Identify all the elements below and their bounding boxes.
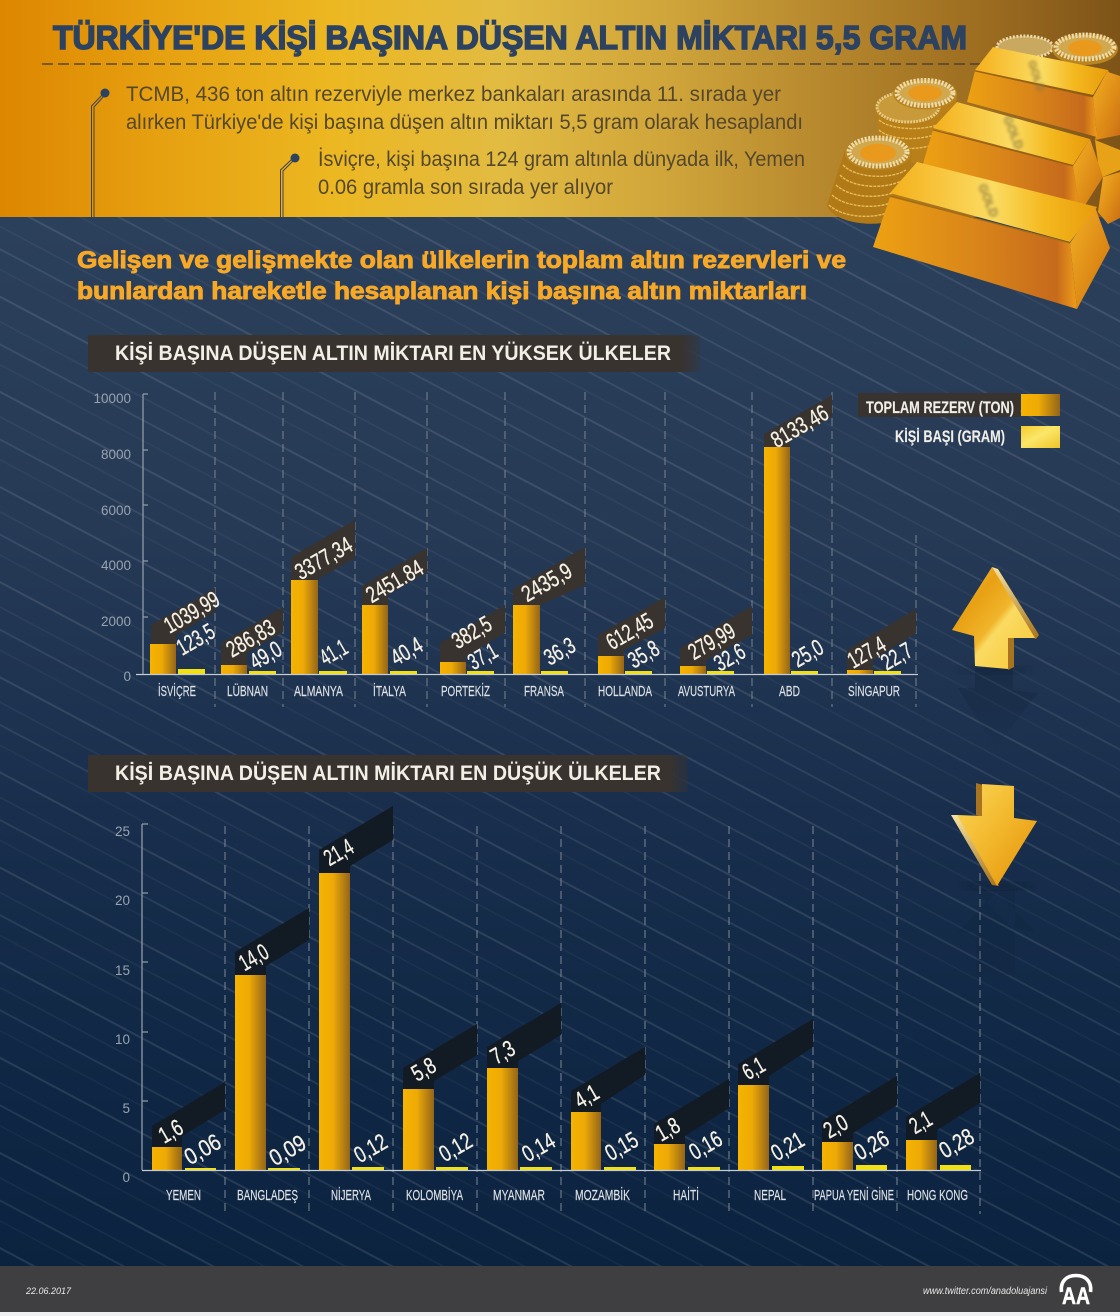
column: Myanmar: [486, 1003, 561, 1204]
column: Papua Yeni Gine: PAPUA YENİ GİNE: [814, 1186, 894, 1204]
column: Mozambik: 4,1: [570, 1079, 603, 1113]
gold bars: rear right: [1095, 72, 1120, 224]
y axis: 20: [115, 893, 130, 908]
column: Lübnan: LÜBNAN: [227, 682, 268, 700]
column: İsviçre: İSVİÇRE: [158, 682, 196, 700]
column: Kolombiya: 0,12: [434, 1127, 477, 1167]
arrow: up: [952, 567, 1039, 748]
y axis: 6000: [101, 503, 131, 518]
column: İtalya: İTALYA: [373, 682, 406, 700]
column: Mozambik: [570, 1047, 645, 1204]
panel: gold header: [0, 0, 1120, 217]
heading: highest countries: KİŞİ BAŞINA DÜŞEN ALTIN MİKTARI EN YÜKSEK ÜLKELER: [115, 342, 671, 365]
title: TÜRKİYE'DE KİŞİ BAŞINA DÜŞEN ALTIN MİKTARI 5,5 GRAM: [53, 19, 967, 56]
text: second note: [318, 148, 805, 199]
text: second note: 0.06 gramla son sırada yer alıyor: [318, 176, 613, 199]
illustration: gold coins and bars: [827, 33, 1120, 309]
column: Almanya: 3377,34: [290, 531, 357, 585]
column: İtalya: [361, 548, 428, 700]
legend: KİŞİ BAŞI (GRAM): [895, 427, 1005, 446]
gold bar: bottom: GOLD: [975, 182, 1001, 220]
date: 22.06.2017: [25, 1286, 72, 1297]
column: Singapur: 22,7: [876, 637, 917, 675]
column: İsviçre: 1039,99: [159, 586, 224, 638]
column: Hong Kong: [904, 1073, 980, 1204]
column: ABD: 25,0: [787, 634, 828, 672]
y axis: [93, 391, 148, 684]
column: Myanmar: MYANMAR: [493, 1187, 545, 1204]
logo: Anadolu Agency: AA: [1062, 1283, 1090, 1310]
column: Hollanda: 612,45: [601, 607, 658, 655]
gold bar: bottom: [873, 162, 1110, 309]
column: Lübnan: [221, 607, 286, 700]
column: Avusturya: [678, 606, 752, 700]
column: Myanmar: 7,3: [486, 1035, 519, 1069]
y axis: 8000: [101, 447, 131, 462]
column: Hollanda: [598, 597, 665, 700]
text: first note: [126, 83, 803, 134]
column: İtalya: 40,4: [386, 632, 427, 671]
column: Bangladeş: BANGLADEŞ: [237, 1187, 298, 1204]
column: Nijerya: NİJERYA: [331, 1186, 371, 1204]
connector: first note: [92, 88, 110, 217]
y axis: 2000: [101, 614, 131, 629]
column: Portekiz: 382,5: [447, 610, 496, 654]
text: second note: İsviçre, kişi başına 124 gram altınla dünyada ilk, Yemen: [318, 148, 805, 171]
column: Fransa: [513, 547, 585, 700]
chart: highest countries: [93, 391, 918, 707]
footer bar: [0, 1266, 1120, 1316]
y axis: 0: [123, 669, 131, 684]
column: Hong Kong: 2,1: [904, 1105, 937, 1139]
y axis: 10000: [93, 391, 131, 406]
column: Haiti: HAİTİ: [673, 1186, 699, 1204]
column: Portekiz: 37,1: [463, 637, 502, 675]
gold bar: top: [967, 47, 1120, 137]
heading: subtitle: [77, 247, 846, 305]
legend: TOPLAM REZERV (TON): [866, 398, 1014, 417]
coin stack: rear left: [876, 78, 957, 163]
column: Nepal: 6,1: [737, 1051, 770, 1085]
column: Yemen: 1,6: [154, 1114, 187, 1148]
column: İsviçre: 123,5: [172, 618, 219, 660]
column: Fransa: 36,3: [539, 632, 580, 670]
column: Nijerya: 21,4: [319, 833, 358, 871]
heading: lowest countries: KİŞİ BAŞINA DÜŞEN ALTIN MİKTARI EN DÜŞÜK ÜLKELER: [115, 762, 661, 785]
column: Hollanda: HOLLANDA: [598, 683, 652, 700]
column: Kolombiya: [403, 1024, 477, 1204]
column: Singapur: [843, 609, 917, 700]
y axis: 5: [122, 1101, 130, 1116]
column: Hong Kong: HONG KONG: [907, 1187, 968, 1204]
y axis: 15: [115, 963, 130, 978]
column: Bangladeş: [234, 908, 310, 1204]
column: Nijerya: [319, 806, 393, 1204]
arrow: down: [951, 783, 1037, 975]
logo: Anadolu Agency: [1061, 1276, 1091, 1310]
column: Nijerya: 0,12: [349, 1128, 392, 1168]
gold bar: middle: GOLD: [1000, 114, 1026, 152]
heading: subtitle: Gelişen ve gelişmekte olan ülkelerin toplam altın rezervleri ve: [77, 247, 846, 274]
y axis: 4000: [101, 558, 131, 573]
column: ABD: 8133,46: [766, 399, 833, 453]
column: İsviçre: [150, 586, 224, 700]
y axis: [115, 824, 148, 1185]
y axis: 0: [122, 1170, 130, 1185]
column: Lübnan: 286,83: [221, 614, 280, 662]
column: Avusturya: AVUSTURYA: [678, 683, 735, 700]
y axis: 10: [115, 1032, 130, 1047]
column: Hollanda: 35,8: [623, 635, 664, 673]
column: Yemen: [152, 1082, 225, 1204]
column: Papua Yeni Gine: [814, 1076, 897, 1204]
column: Singapur: SİNGAPUR: [848, 682, 900, 700]
text: first note: alırken Türkiye'de kişi başına düşen altın miktarı 5,5 gram olarak hesaplandı: [126, 111, 803, 134]
column: Avusturya: 279,99: [683, 617, 740, 665]
coins: top: [997, 33, 1118, 65]
column: Almanya: 41,1: [315, 634, 352, 670]
column: Haiti: 0,16: [684, 1125, 727, 1165]
column: Lübnan: 49,0: [245, 636, 286, 675]
text: first note: TCMB, 436 ton altın rezerviyle merkez bankaları arasında 11. sırada yer: [126, 83, 781, 106]
column: Mozambik: 0,15: [600, 1126, 643, 1166]
column: Portekiz: [440, 605, 505, 700]
legend: [858, 393, 1060, 448]
column: Bangladeş: 14,0: [234, 938, 273, 976]
column: Myanmar: 0,14: [517, 1127, 560, 1167]
column: Bangladeş: 0,09: [265, 1129, 310, 1171]
column: Papua Yeni Gine: 0,26: [849, 1125, 894, 1165]
connector: second note: [280, 154, 300, 217]
column: Hong Kong: 0,28: [934, 1123, 979, 1163]
column: Nepal: [737, 1019, 813, 1204]
column: Fransa: FRANSA: [524, 683, 564, 700]
heading: lowest countries: [88, 755, 688, 792]
column: Fransa: 2435,9: [517, 557, 576, 607]
gold bar: top: GOLD: [1025, 59, 1046, 93]
heading: subtitle: bunlardan hareketle hesaplanan kişi başına altın miktarları: [77, 278, 807, 305]
heading: highest countries: [88, 335, 700, 372]
column: Kolombiya: 5,8: [407, 1052, 440, 1086]
column: Avusturya: 32,6: [709, 638, 750, 676]
column: Nepal: 0,21: [766, 1126, 809, 1166]
column: Portekiz: PORTEKİZ: [441, 682, 490, 700]
column: Kolombiya: KOLOMBİYA: [406, 1186, 463, 1204]
column: Singapur: 127,4: [843, 631, 890, 673]
column: ABD: ABD: [779, 683, 800, 700]
column: Yemen: YEMEN: [166, 1187, 201, 1204]
column: Yemen: 0,06: [180, 1128, 225, 1170]
source link: www.twitter.com/anadoluajansi: [923, 1286, 1048, 1297]
y axis: 25: [115, 824, 130, 839]
column: Almanya: [290, 520, 357, 700]
column: Nepal: NEPAL: [754, 1187, 786, 1204]
column: Haiti: [651, 1079, 729, 1204]
column: Almanya: ALMANYA: [294, 683, 343, 700]
column: Haiti: 1,8: [651, 1112, 684, 1146]
gold bar: middle: [922, 102, 1103, 213]
column: Papua Yeni Gine: 2,0: [819, 1109, 852, 1143]
column: Mozambik: MOZAMBİK: [575, 1186, 630, 1204]
coin stack: front left: [827, 136, 912, 224]
chart: lowest countries: [115, 806, 981, 1214]
column: İtalya: 2451.84: [361, 554, 428, 608]
column: ABD: [764, 395, 833, 700]
